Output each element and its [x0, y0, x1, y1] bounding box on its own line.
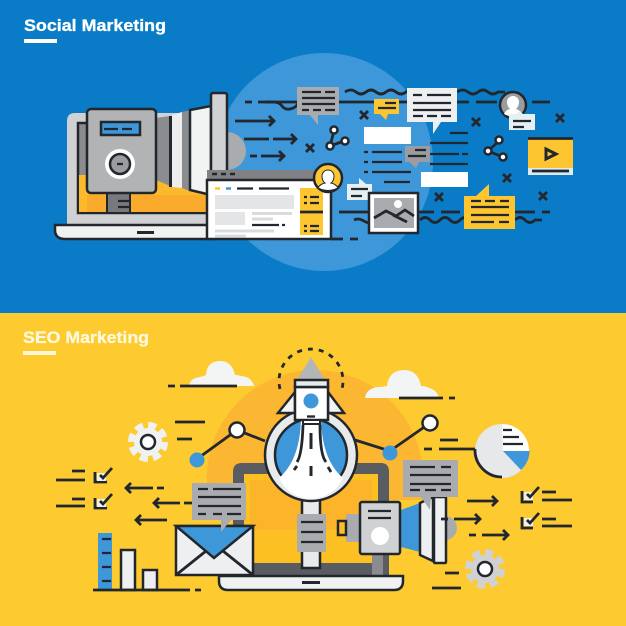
- laptop: [55, 113, 218, 239]
- icon: share node right: [484, 136, 506, 160]
- speech bubble yellow: [374, 99, 399, 120]
- lines lower: [331, 212, 550, 239]
- text lines centre: [364, 127, 468, 187]
- icon: share node left: [326, 126, 348, 150]
- speech bubble gray right: [403, 460, 458, 510]
- arrows: [235, 116, 296, 161]
- bar chart: [93, 533, 201, 590]
- speech bubble large yellow: [464, 184, 515, 229]
- megaphone cone: [156, 93, 246, 195]
- speech bubble white: [407, 88, 457, 134]
- heading: seo marketing: SEO Marketing: [23, 329, 149, 347]
- icon: megaphone right: [338, 497, 457, 563]
- icon: envelope: [176, 520, 253, 575]
- heading: seo marketing: [23, 329, 149, 355]
- chart line right: [355, 416, 438, 460]
- wavy and dashed lines top: [245, 90, 550, 109]
- heading: social marketing: Social Marketing: [24, 17, 166, 35]
- speaker handle: [346, 514, 360, 542]
- icon: magnifier with rocket: [265, 349, 357, 568]
- rocket: [278, 357, 344, 424]
- icon: picture frame: [369, 193, 418, 233]
- speaker box: [360, 502, 400, 554]
- magnifier handle: [302, 498, 320, 568]
- icon: avatar yellow: [314, 164, 342, 192]
- chart line left: [190, 422, 265, 468]
- cross marks: [306, 111, 564, 201]
- laptop: [219, 463, 403, 590]
- icon: cloud left: [168, 361, 254, 386]
- speech bubble small white: [347, 178, 372, 200]
- icon: megaphone on laptop: [55, 93, 246, 239]
- browser window: [207, 170, 331, 239]
- icon: video player: [528, 138, 573, 175]
- megaphone horn: [401, 503, 420, 552]
- text block on handle: [297, 514, 326, 552]
- icon: gear left: [132, 422, 205, 458]
- arrows left: [126, 483, 192, 525]
- panel: seo marketing: [0, 313, 626, 626]
- checklist left: [56, 468, 112, 508]
- speech bubble gray: [297, 87, 339, 125]
- background circle: [215, 53, 433, 271]
- dotted orbit: [279, 349, 343, 389]
- icon: gear right: [432, 552, 502, 588]
- lens: [265, 409, 357, 501]
- checklist right: [522, 487, 572, 528]
- heading: social marketing: [24, 17, 166, 43]
- icon: avatar with note: [500, 92, 535, 130]
- pie chart: [424, 424, 530, 478]
- arrows right: [441, 496, 508, 540]
- speech bubble gray left: [192, 483, 246, 532]
- background circle: [207, 370, 423, 500]
- speech bubble small gray: [405, 146, 430, 168]
- panel: social marketing: [0, 0, 626, 313]
- icon: cloud right: [365, 370, 455, 398]
- speaker device: [87, 109, 156, 213]
